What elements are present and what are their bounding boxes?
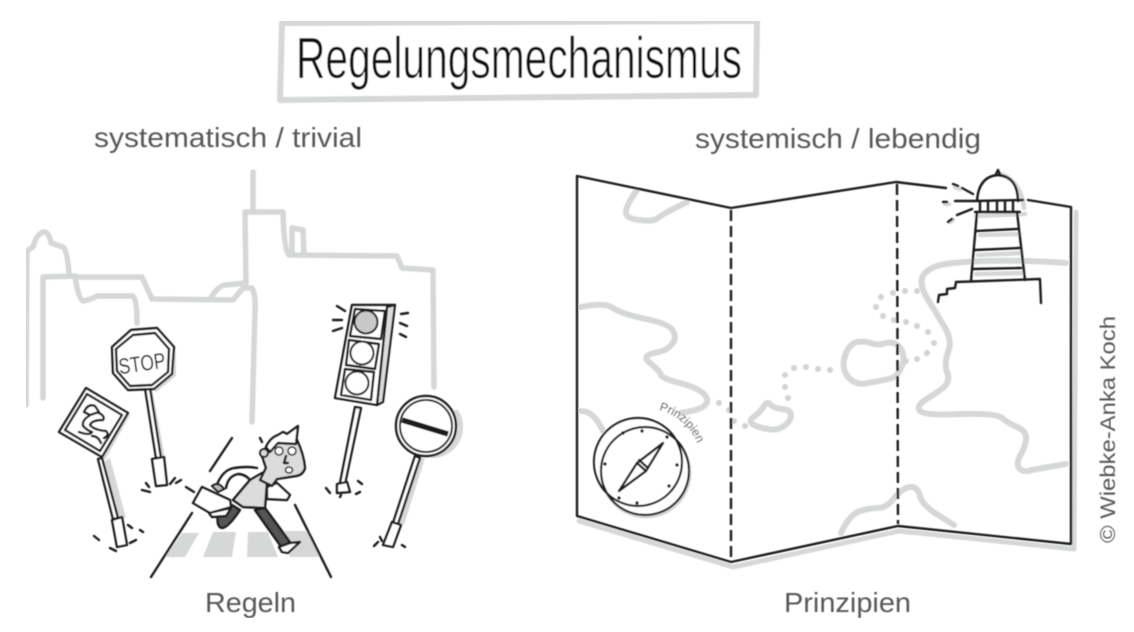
ear (260, 449, 268, 457)
back leg (218, 505, 240, 528)
map outline (577, 176, 1071, 562)
city skyline (26, 172, 434, 422)
road sign: slippery road (59, 388, 143, 551)
traffic light (326, 305, 408, 497)
hair (266, 426, 298, 452)
compass ticks (603, 429, 679, 505)
shoe (279, 542, 300, 553)
front arm (267, 483, 290, 500)
torso (233, 473, 267, 508)
running man with briefcase (193, 426, 305, 553)
title box (280, 21, 757, 100)
road sign: stop: STOP (117, 348, 167, 379)
title: Regelungsmechanismus (296, 26, 742, 91)
mouth (286, 467, 292, 473)
back arm (216, 467, 257, 500)
subtitle: systemisch / lebendig: systemisch / lebendig (695, 123, 981, 154)
lighthouse (938, 170, 1041, 303)
map fold lines (731, 184, 898, 560)
compass needle (619, 443, 663, 491)
crosswalk (151, 438, 331, 577)
subtitle: systematisch / trivial: systematisch / trivial (94, 122, 362, 153)
label: Regeln: Regeln (205, 587, 296, 618)
road sign: stop (112, 328, 194, 492)
briefcase (193, 487, 231, 513)
copyright credit: © Wiebke-Anka Koch (1097, 316, 1120, 543)
map landforms (581, 190, 1066, 533)
front leg (255, 508, 290, 548)
compass (592, 402, 703, 519)
glasses (275, 447, 283, 455)
road sign: no entry (374, 396, 463, 547)
light rays (943, 184, 973, 222)
label: Prinzipien: Prinzipien (784, 587, 911, 618)
map shadow (579, 212, 1076, 567)
compass label: Prinzipien (660, 402, 703, 444)
dotted route (716, 288, 937, 429)
folded map (577, 176, 1076, 567)
head (260, 440, 305, 486)
